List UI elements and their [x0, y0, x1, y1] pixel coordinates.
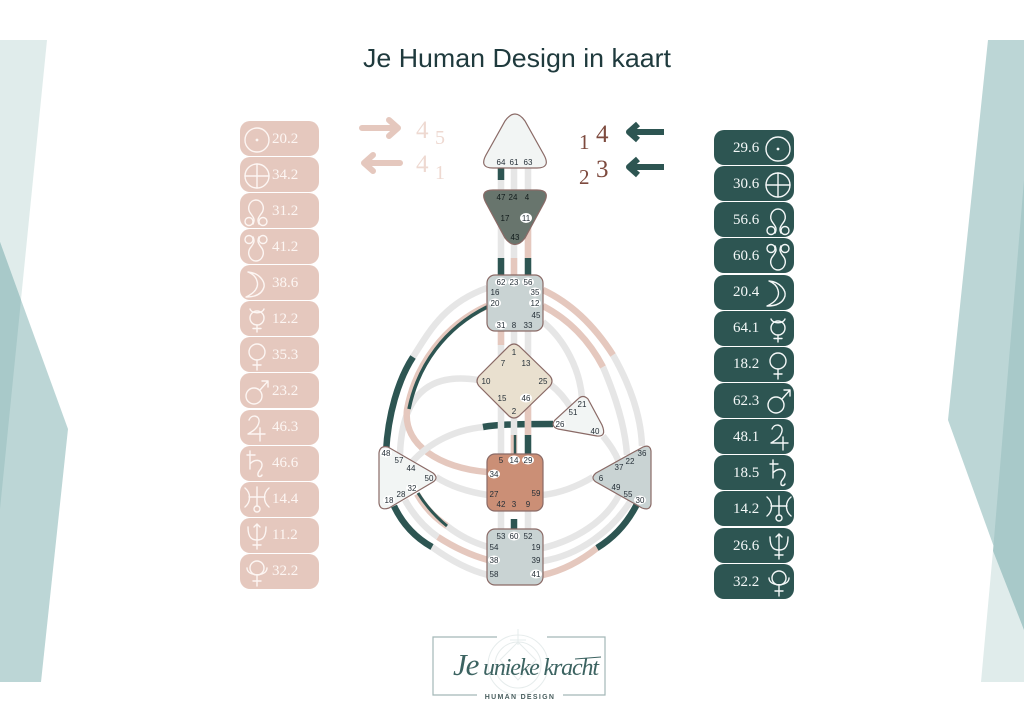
- row: venus 35.3: 35.3: [272, 347, 298, 363]
- row: south node 41.2: [240, 229, 319, 264]
- text: 4 5: 4: [416, 117, 429, 144]
- row: pluto 32.2: [714, 564, 794, 599]
- text: 2 3: [579, 156, 608, 189]
- center: sacral: 3: [512, 500, 517, 509]
- center: throat: 31: [497, 321, 506, 330]
- center: g: 7: [501, 359, 506, 368]
- row: earth 34.2: [240, 157, 319, 192]
- row: moon 20.4: 20.4: [733, 284, 760, 300]
- row: mars 62.3: 62.3: [733, 393, 759, 409]
- chart: body graph: [379, 114, 651, 585]
- center: root: 19: [532, 543, 541, 552]
- center: solar plexus: 37: [615, 463, 624, 472]
- center: root: 53: [497, 532, 506, 541]
- row: north node 31.2: [240, 193, 319, 228]
- center: heart: 51: [569, 408, 578, 417]
- center: g: 13: [522, 359, 531, 368]
- center: spleen: 50: [425, 474, 434, 483]
- center: throat: 35: [531, 288, 540, 297]
- center: root: 39: [532, 556, 541, 565]
- row: north node 56.6: [714, 202, 794, 237]
- row: earth 34.2: 34.2: [272, 167, 298, 183]
- center: g: 25: [539, 377, 548, 386]
- row: jupiter 48.1: 48.1: [733, 429, 759, 445]
- center: sacral: 27: [490, 490, 499, 499]
- center: spleen: 48: [382, 449, 391, 458]
- row: jupiter 48.1: [714, 419, 794, 454]
- row: jupiter 46.3: [240, 410, 319, 445]
- row: saturn 46.6: 46.6: [272, 455, 299, 471]
- row: uranus 14.2: 14.2: [733, 501, 759, 517]
- row: sun 20.2: 20.2: [272, 131, 298, 147]
- center: head: 63: [524, 158, 533, 167]
- row: sun 29.6: [714, 130, 794, 165]
- center: root: 41: [532, 570, 541, 579]
- center: ajna: 24: [509, 193, 518, 202]
- center: throat: 8: [512, 321, 517, 330]
- row: sun 29.6: 29.6: [733, 140, 760, 156]
- center: sacral: 5: [499, 456, 504, 465]
- row: neptune 26.6: 26.6: [733, 538, 760, 554]
- center: sacral: 42: [497, 500, 506, 509]
- center: ajna: 4: [525, 193, 530, 202]
- row: neptune 11.2: [240, 518, 319, 553]
- row: mercury 12.2: [240, 301, 319, 336]
- row: mercury 12.2: 12.2: [272, 311, 298, 327]
- row: neptune 11.2: 11.2: [272, 527, 298, 543]
- text: 1 4: 4: [596, 121, 609, 148]
- center: root: 54: [490, 543, 499, 552]
- text: 4 5: [416, 117, 445, 149]
- row: moon 20.4: [714, 275, 794, 310]
- row: saturn 18.5: [714, 455, 794, 490]
- title: Je Human Design in kaart: [363, 43, 672, 73]
- row: mars 23.2: [240, 373, 319, 408]
- text: 1 4: [579, 121, 609, 154]
- center: sacral: [487, 454, 543, 511]
- center: root: 38: [490, 556, 499, 565]
- center: solar plexus: 55: [624, 490, 633, 499]
- legend: left arrows and numbers: [362, 117, 445, 184]
- center: solar plexus: 22: [626, 457, 635, 466]
- row: earth 30.6: [714, 166, 794, 201]
- center: throat: 56: [524, 278, 533, 287]
- center: spleen: 44: [407, 464, 416, 473]
- center: sacral: 14: [510, 456, 519, 465]
- row: moon 38.6: [240, 265, 319, 300]
- 44-26 arc: [412, 427, 483, 462]
- row: uranus 14.2: [714, 491, 794, 526]
- logo: frame: [433, 637, 605, 695]
- center: ajna: 17: [501, 214, 510, 223]
- center: spleen: 28: [397, 490, 406, 499]
- center: root: 52: [524, 532, 533, 541]
- arrow: top left pointing: [629, 124, 664, 140]
- center: ajna: 47: [497, 193, 506, 202]
- row: earth 30.6: 30.6: [733, 176, 760, 192]
- center: throat: 12: [531, 299, 540, 308]
- row: north node 31.2: 31.2: [272, 203, 298, 219]
- center: solar plexus: 30: [636, 496, 645, 505]
- center: heart: 21: [578, 400, 587, 409]
- text: 2 3: 3: [596, 156, 608, 183]
- row: venus 35.3: [240, 337, 319, 372]
- row: venus 18.2: 18.2: [733, 356, 759, 372]
- text: 4 5: 5: [435, 127, 445, 149]
- row: sun 20.2: [240, 121, 319, 156]
- arrow: bottom left pointing: [629, 159, 664, 175]
- center: g: 10: [482, 377, 491, 386]
- row: moon 38.6: 38.6: [272, 275, 299, 291]
- center: ajna: [484, 190, 546, 244]
- center: throat: [487, 275, 543, 331]
- center: ajna: 43: [511, 233, 520, 242]
- center: solar plexus: [593, 446, 651, 509]
- channels: [386, 165, 642, 575]
- center: throat: 23: [510, 278, 519, 287]
- center: g: 46: [522, 394, 531, 403]
- center: throat: 62: [497, 278, 506, 287]
- row: saturn 46.6: [240, 446, 319, 481]
- left background shapes: [0, 40, 68, 682]
- text: 1 4: 1: [579, 130, 590, 154]
- row: south node 60.6: [714, 238, 794, 273]
- center: sacral: 9: [526, 500, 531, 509]
- row: uranus 14.4: 14.4: [272, 491, 299, 507]
- text: 4 1: [416, 151, 445, 184]
- 50-27 and 59-6: [436, 477, 488, 495]
- center: sacral: 34: [490, 470, 499, 479]
- right arcs: [543, 322, 582, 398]
- arrow: right pointing: [362, 120, 398, 136]
- logo: faint body graph mark: [488, 629, 548, 695]
- center: root: 60: [510, 532, 519, 541]
- center: throat: 16: [491, 288, 500, 297]
- center: g: [477, 344, 552, 418]
- center: throat: 33: [524, 321, 533, 330]
- center: heart: [553, 396, 604, 436]
- text: 4 1: 1: [435, 162, 445, 184]
- legend: right arrows and numbers: [579, 121, 664, 189]
- logo: script name: Je unieke kracht: [453, 647, 600, 682]
- row: south node 60.6: 60.6: [733, 248, 760, 264]
- logo: subtitle: HUMAN DESIGN: [485, 694, 555, 701]
- center: solar plexus: 49: [612, 483, 621, 492]
- row: neptune 26.6: [714, 528, 794, 563]
- center: g: 15: [498, 394, 507, 403]
- row: saturn 18.5: 18.5: [733, 465, 759, 481]
- row: venus 18.2: [714, 347, 794, 382]
- row: jupiter 46.3: 46.3: [272, 419, 298, 435]
- right background shapes: [948, 40, 1024, 682]
- center: head: 64: [497, 158, 506, 167]
- arrow: left pointing: [364, 155, 400, 171]
- center: solar plexus: 36: [638, 449, 647, 458]
- center: head: 61: [510, 158, 519, 167]
- center: spleen: 57: [395, 456, 404, 465]
- row: south node 41.2: 41.2: [272, 239, 298, 255]
- lower left arcs: [447, 526, 488, 547]
- lower right arcs: [543, 495, 619, 548]
- center: spleen: 18: [385, 496, 394, 505]
- row: pluto 32.2: 32.2: [272, 563, 298, 579]
- center: throat: 20: [491, 299, 500, 308]
- row: pluto 32.2: 32.2: [733, 574, 759, 590]
- logo: flourish stroke: [575, 657, 601, 659]
- center: solar plexus: 6: [599, 474, 604, 483]
- center: g: 2: [512, 407, 517, 416]
- logo: [433, 629, 605, 701]
- row: mars 23.2: 23.2: [272, 383, 298, 399]
- text: 4 1: 4: [416, 151, 429, 178]
- vertical channels: [501, 165, 528, 275]
- row: mercury 64.1: [714, 311, 794, 346]
- center: spleen: 32: [408, 484, 417, 493]
- row: mercury 64.1: 64.1: [733, 320, 759, 336]
- row: mars 62.3: [714, 383, 794, 418]
- row: north node 56.6: 56.6: [733, 212, 760, 228]
- center: head: [484, 114, 546, 168]
- text: 2 3: 2: [579, 165, 590, 189]
- center: heart: 26: [556, 420, 565, 429]
- center: heart: 40: [591, 427, 600, 436]
- center: root: 58: [490, 570, 499, 579]
- center: throat: 45: [532, 311, 541, 320]
- center: spleen: [379, 447, 436, 509]
- center: ajna: 11: [522, 214, 531, 223]
- center: g: 1: [512, 348, 517, 357]
- 10-57 arc and left arcs: [400, 379, 478, 455]
- center: root: [487, 529, 543, 585]
- center: sacral: 29: [524, 456, 533, 465]
- panel: left planet column: [240, 121, 319, 589]
- row: pluto 32.2: [240, 554, 319, 589]
- center: sacral: 59: [532, 489, 541, 498]
- panel: right planet column: [714, 130, 794, 599]
- row: uranus 14.4: [240, 482, 319, 517]
